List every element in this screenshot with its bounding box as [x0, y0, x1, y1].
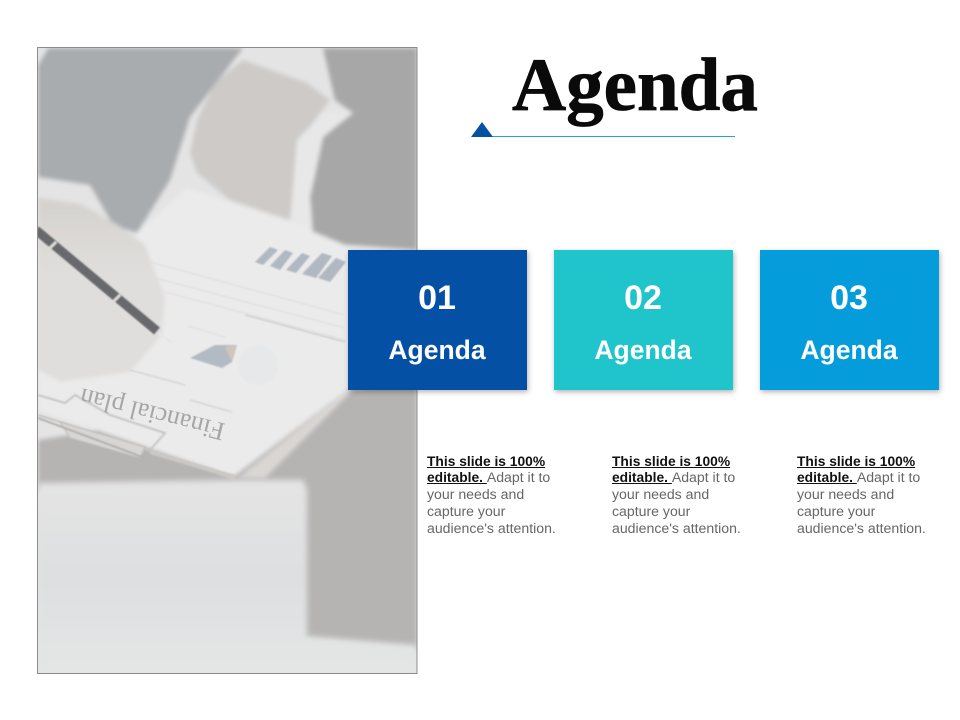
text block 2 — [612, 454, 741, 536]
text block 3 — [797, 454, 926, 536]
paper text lines — [130, 314, 345, 412]
paper chart bars — [255, 247, 346, 282]
blurred foreground object — [38, 480, 417, 673]
text block 1: This slide is 100% — [427, 454, 545, 469]
card 02: 02 — [624, 279, 662, 317]
panel: faded business photo — [37, 47, 735, 674]
card 03: 03 — [830, 279, 868, 317]
text block 1: your needs and — [427, 486, 524, 502]
card 02 — [554, 250, 733, 390]
text block 3: This slide is 100% — [797, 454, 915, 469]
clipboard — [38, 395, 235, 477]
text block 1: editable. Adapt it to — [427, 469, 550, 485]
title: Agenda — [512, 44, 758, 127]
card 03 — [760, 250, 939, 390]
icon: triangle marker — [471, 122, 493, 137]
text block 2: This slide is 100% — [612, 454, 730, 469]
financial plan heading: Financial plan — [77, 382, 227, 446]
card 03: Agenda — [800, 335, 898, 365]
card 01 — [348, 250, 527, 390]
card 02: Agenda — [594, 335, 692, 365]
pen — [38, 226, 160, 335]
text block 3: your needs and — [797, 486, 894, 502]
text block 1: audience's attention. — [427, 520, 556, 536]
card 01: 01 — [418, 279, 456, 317]
title rule — [490, 136, 735, 138]
text block 2: audience's attention. — [612, 520, 741, 536]
text block 3: capture your — [797, 503, 875, 519]
text block 1 — [427, 454, 556, 536]
text block 1: capture your — [427, 503, 505, 519]
small pie chart — [190, 344, 238, 368]
text block 3: editable. Adapt it to — [797, 469, 920, 485]
text block 3: audience's attention. — [797, 520, 926, 536]
text block 2: editable. Adapt it to — [612, 469, 735, 485]
card 01: Agenda — [388, 335, 486, 365]
text block 2: your needs and — [612, 486, 709, 502]
text block 2: capture your — [612, 503, 690, 519]
